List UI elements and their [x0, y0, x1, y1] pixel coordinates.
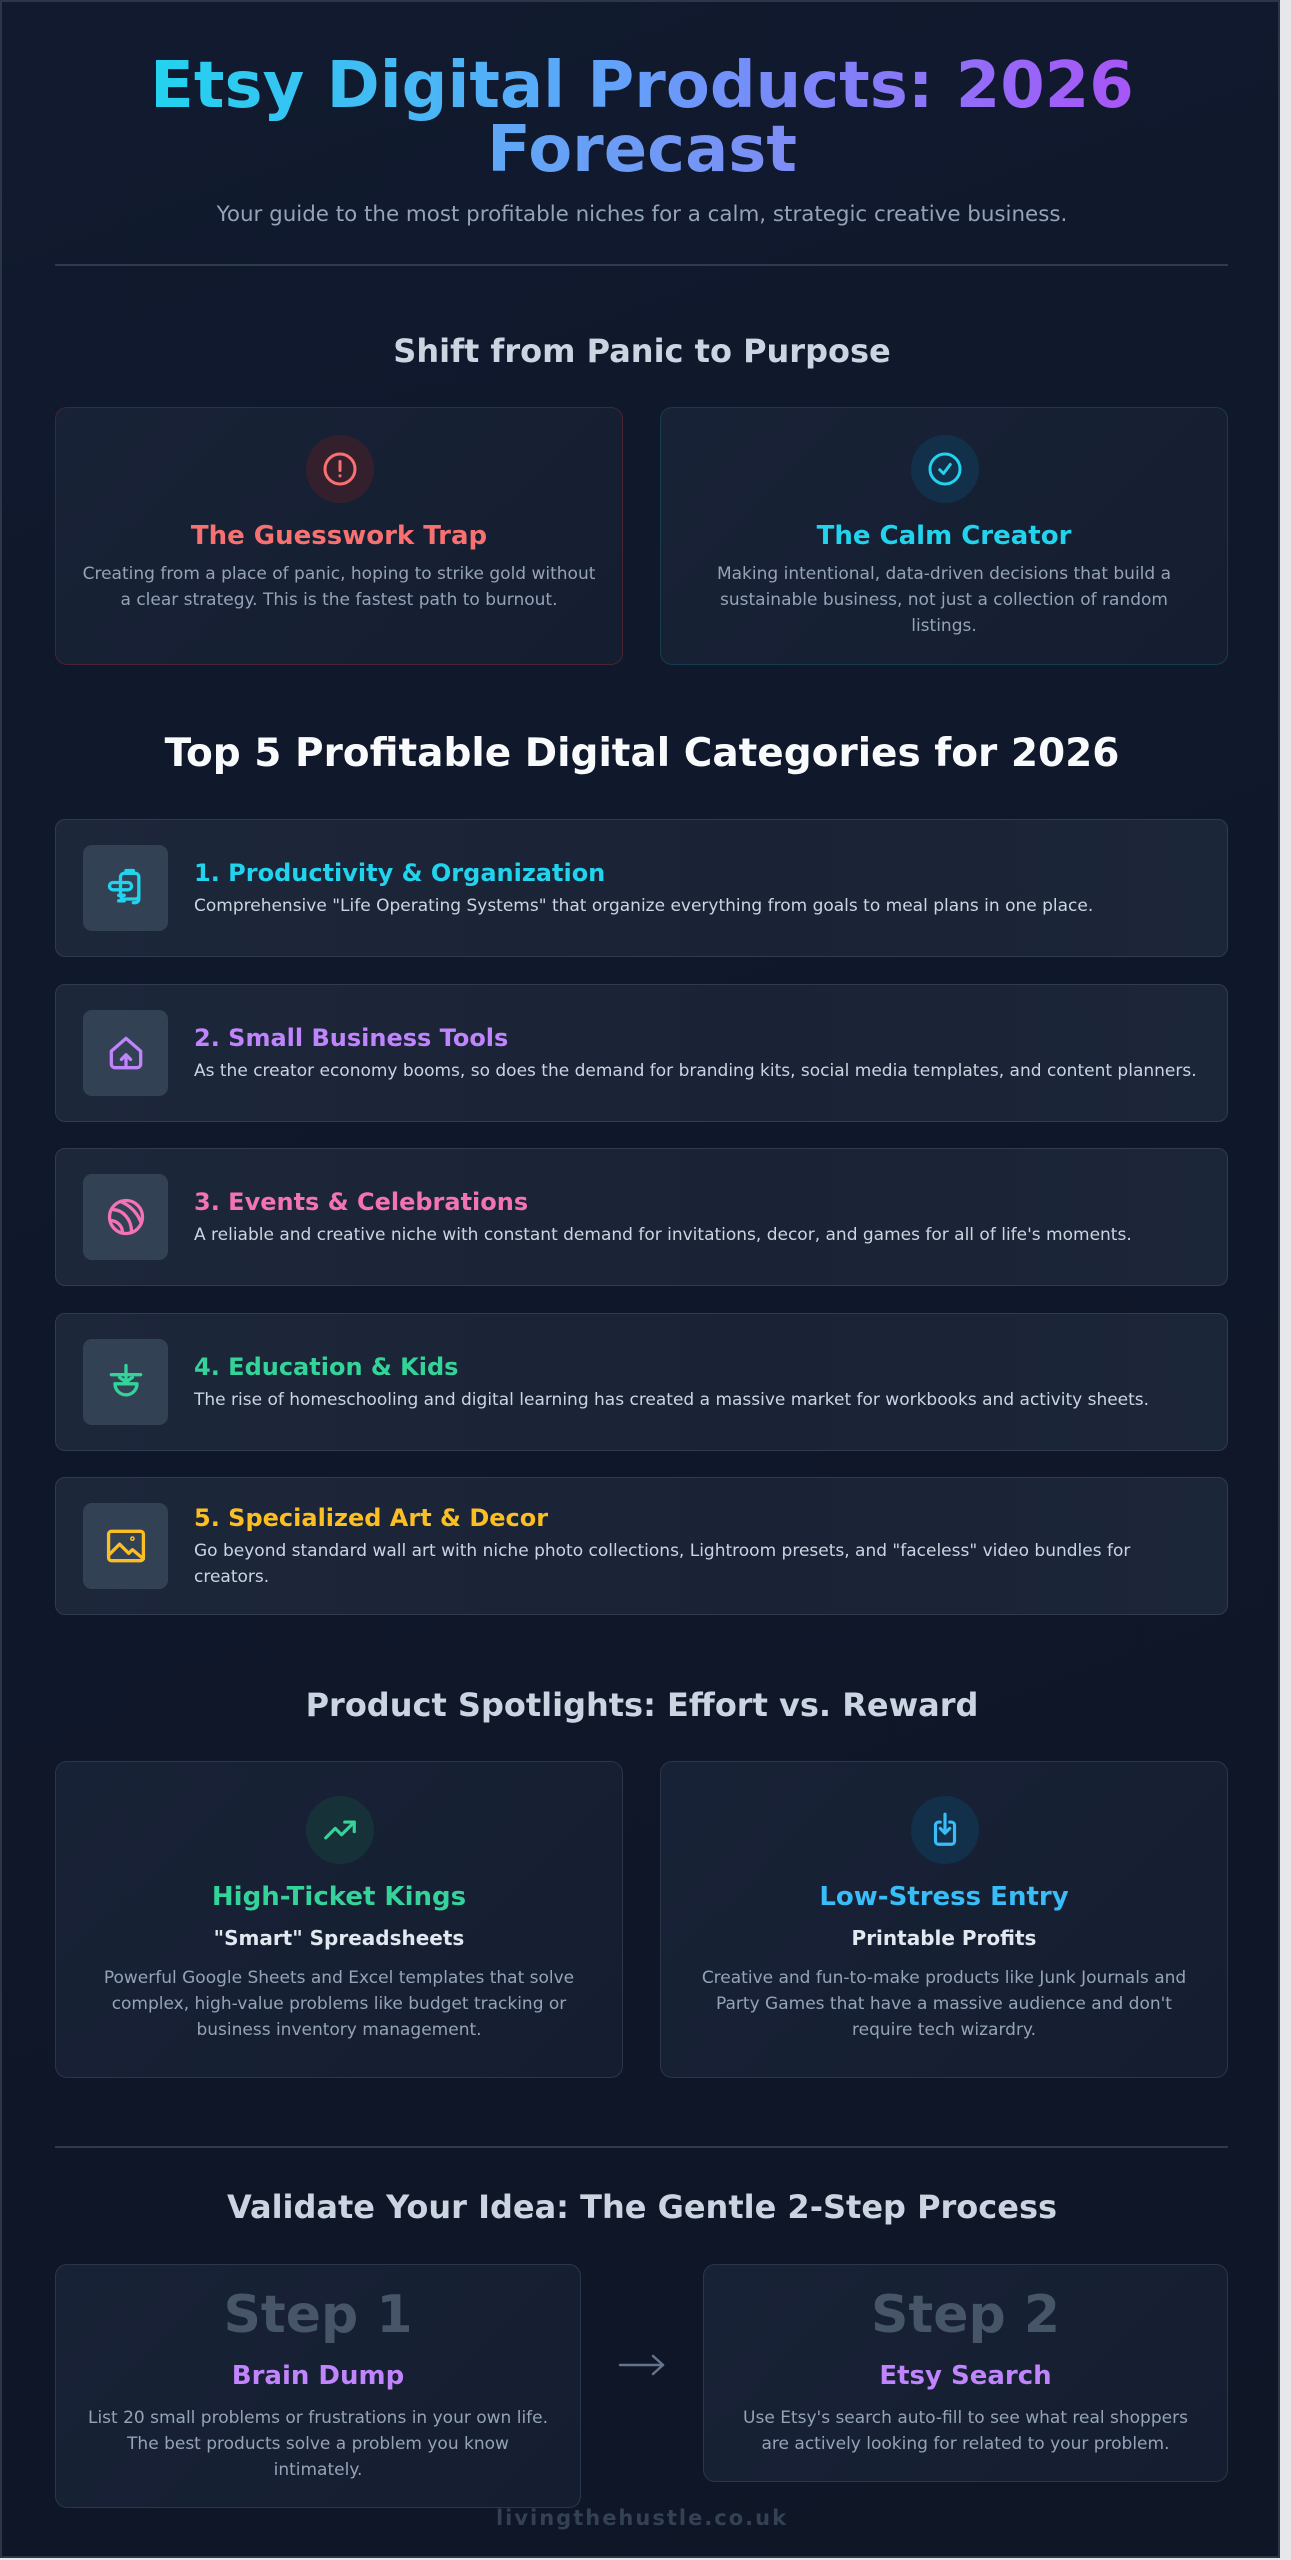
step text: The best products solve a problem you know — [127, 2434, 509, 2454]
step 2 — [703, 2264, 1228, 2482]
category 5 — [55, 1477, 1228, 1615]
subtitle: Your guide to the most profitable niches for a calm, strategic creative business. — [217, 202, 1067, 227]
step text: are actively looking for related to your problem. — [762, 2434, 1169, 2454]
card text: require tech wizardry. — [852, 2020, 1036, 2040]
icon: ball — [83, 1174, 168, 1260]
panel: calm creator — [660, 407, 1228, 665]
category 1 — [55, 819, 1228, 957]
panel: guesswork trap — [55, 407, 623, 665]
card text: listings. — [911, 616, 977, 636]
heading: top 5: Top 5 Profitable Digital Categories for 2026 — [165, 731, 1119, 776]
icon: check — [911, 435, 979, 503]
category 2 — [55, 984, 1228, 1122]
panel: low-stress entry — [660, 1761, 1228, 2078]
icon: image — [83, 1503, 168, 1589]
title — [150, 49, 1134, 187]
title: Etsy Digital Products: 2026 — [150, 49, 1134, 123]
card text: Creative and fun-to-make products like Junk Journals and — [702, 1968, 1186, 1988]
icon: trend — [306, 1796, 374, 1864]
card text — [104, 1968, 574, 2040]
arrow — [618, 2354, 664, 2376]
category 3 — [55, 1148, 1228, 1286]
card subtitle: Printable Profits — [852, 1926, 1036, 1950]
step title: Brain Dump — [232, 2361, 404, 2391]
step text: List 20 small problems or frustrations in your own life. — [88, 2408, 548, 2428]
card text: a clear strategy. This is the fastest path to burnout. — [120, 590, 558, 610]
category 4: 4. Education & Kids — [194, 1353, 458, 1381]
category 4 — [55, 1313, 1228, 1451]
card text: business inventory management. — [196, 2020, 482, 2040]
category 5: 5. Specialized Art & Decor — [194, 1504, 548, 1532]
icon: plant bowl — [83, 1339, 168, 1425]
category 1: 1. Productivity & Organization — [194, 859, 605, 887]
card title: High-Ticket Kings — [212, 1882, 466, 1912]
step text: intimately. — [274, 2460, 362, 2480]
icon: briefcase — [83, 845, 168, 931]
icon: alert — [306, 435, 374, 503]
card text: Powerful Google Sheets and Excel templates that solve — [104, 1968, 574, 1988]
card text: Creating from a place of panic, hoping to strike gold without — [83, 564, 595, 584]
category 3: A reliable and creative niche with constant demand for invitations, decor, and games for all of life's moments. — [194, 1225, 1132, 1245]
card title: The Calm Creator — [817, 521, 1071, 551]
card subtitle: "Smart" Spreadsheets — [214, 1926, 464, 1950]
category 5: Go beyond standard wall art with niche photo collections, Lightroom presets, and "faceless" video bundles for — [194, 1541, 1130, 1561]
category 2: As the creator economy booms, so does the demand for branding kits, social media templates, and content planners. — [194, 1061, 1197, 1081]
step number: Step 2 — [871, 2285, 1060, 2345]
category 4: The rise of homeschooling and digital learning has created a massive market for workbooks and activity sheets. — [194, 1390, 1149, 1410]
card text — [702, 1968, 1186, 2040]
heading: validate: Validate Your Idea: The Gentle 2-Step Process — [227, 2188, 1057, 2226]
heading: product spotlights: Product Spotlights: Effort vs. Reward — [306, 1686, 978, 1724]
card text — [83, 564, 595, 610]
panel: high-ticket kings — [55, 1761, 623, 2078]
card text: sustainable business, not just a collection of random — [720, 590, 1168, 610]
footer: livingthehustle.co.uk — [496, 2506, 788, 2530]
step text — [743, 2408, 1188, 2454]
card text: complex, high-value problems like budget tracking or — [112, 1994, 566, 2014]
card text — [717, 564, 1171, 636]
card text: Making intentional, data-driven decisions that build a — [717, 564, 1171, 584]
card title: The Guesswork Trap — [191, 521, 487, 551]
category 5: creators. — [194, 1567, 269, 1587]
icon: house upload — [83, 1010, 168, 1096]
card title: Low-Stress Entry — [819, 1882, 1069, 1912]
category 3: 3. Events & Celebrations — [194, 1188, 528, 1216]
step number: Step 1 — [223, 2285, 413, 2345]
category 1: Comprehensive "Life Operating Systems" that organize everything from goals to meal plans in one place. — [194, 896, 1093, 916]
heading: shift from panic to purpose: Shift from Panic to Purpose — [393, 332, 891, 370]
step text — [88, 2408, 548, 2480]
category 2: 2. Small Business Tools — [194, 1024, 508, 1052]
step title: Etsy Search — [879, 2361, 1052, 2391]
title: Forecast — [487, 113, 797, 187]
card text: Party Games that have a massive audience and don't — [716, 1994, 1172, 2014]
icon: download — [911, 1796, 979, 1864]
step text: Use Etsy's search auto-fill to see what real shoppers — [743, 2408, 1188, 2428]
step 1 — [55, 2264, 581, 2508]
